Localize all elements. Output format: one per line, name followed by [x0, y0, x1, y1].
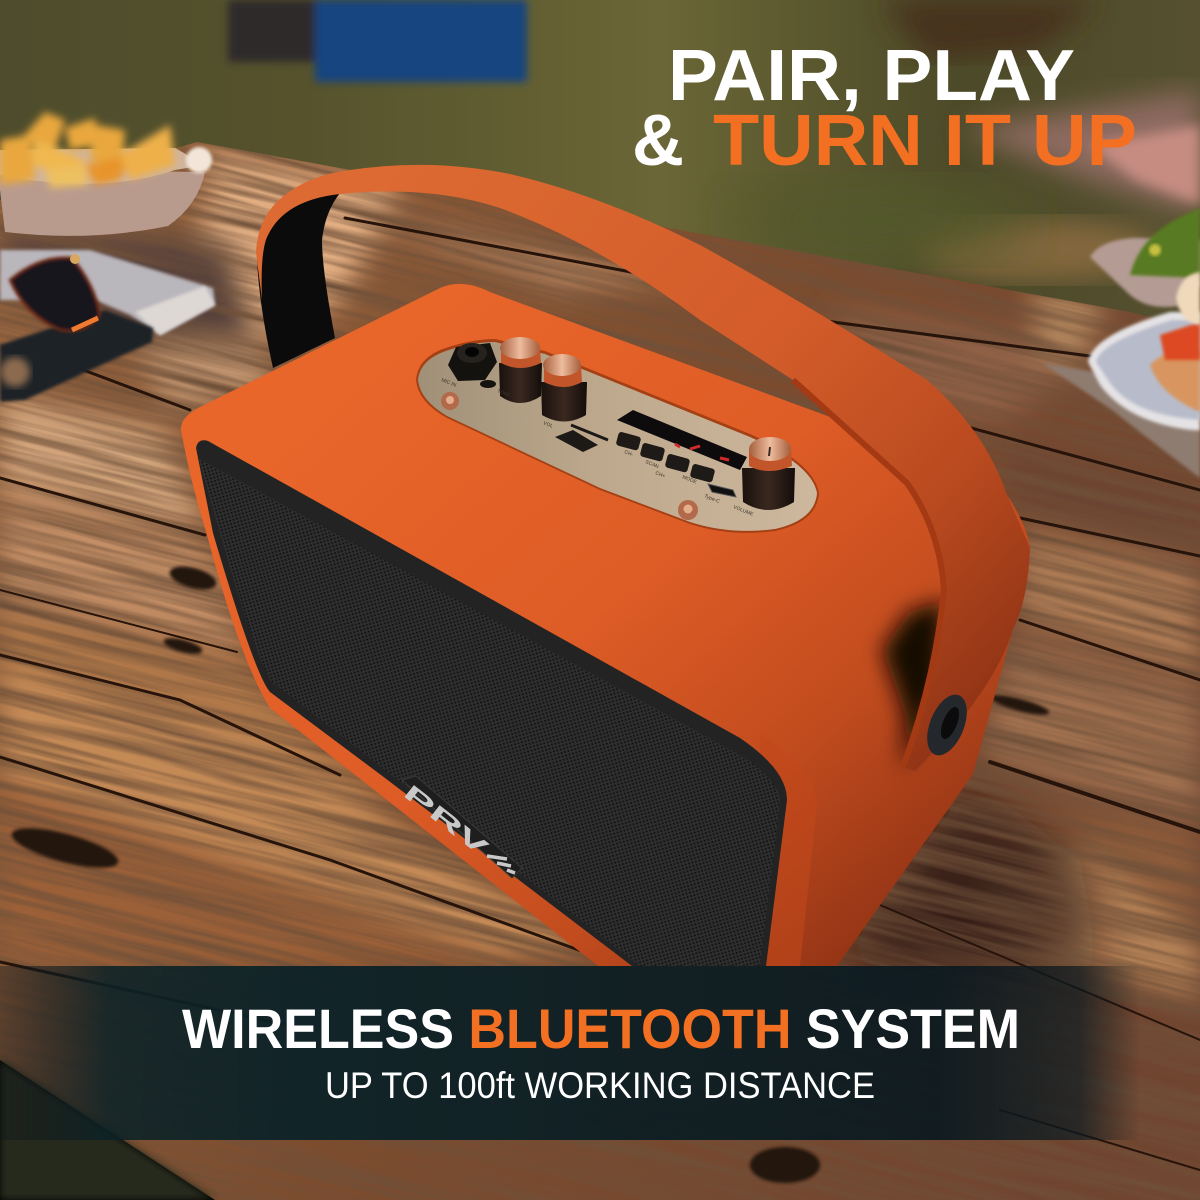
napkin [0, 250, 215, 335]
plate labels [440, 377, 755, 518]
plate labels: VOLUME [732, 504, 755, 518]
speaker [181, 165, 1030, 966]
placemat [1042, 363, 1200, 478]
bowl of fries [0, 112, 212, 236]
banner title: WIRELESS BLUETOOTH SYSTEM [182, 997, 1020, 1060]
ground below table [0, 1060, 215, 1200]
plank seams [0, 218, 1200, 1170]
control plate [416, 337, 819, 533]
speaker grille [196, 440, 787, 966]
plate labels: CH+ [654, 470, 666, 480]
usb-c port [708, 484, 736, 497]
food [1150, 349, 1200, 412]
headline [632, 36, 1137, 181]
plate labels: VOL [542, 420, 554, 430]
knob 2 [541, 354, 587, 422]
plate [1088, 312, 1200, 431]
wood knots [8, 562, 1051, 1183]
back bowl [1090, 238, 1200, 307]
sunglasses, napkin and phone [0, 250, 215, 402]
speaker cast shadow [830, 780, 1100, 966]
plate labels: SCAN [644, 459, 660, 470]
salad [1130, 208, 1200, 278]
plate labels: TONE [496, 388, 512, 399]
handle mount bolt [919, 689, 975, 761]
control buttons [616, 431, 715, 483]
plates of food on the right [1042, 208, 1200, 478]
knob 1 [499, 337, 542, 403]
plate labels: MIC IN [440, 377, 457, 389]
cooler [228, 0, 527, 82]
blanket [960, 90, 1200, 215]
usb and sd slots [555, 425, 608, 452]
headline ampersand: & [632, 101, 684, 181]
grille frame edge [760, 735, 817, 966]
headline line 2: TURN IT UP [713, 101, 1137, 181]
jack input [448, 343, 497, 388]
speaker body [181, 284, 1030, 966]
handle strap [256, 165, 1030, 771]
sunglasses [10, 258, 100, 331]
screw right [678, 500, 698, 520]
plate labels: Type-C [703, 493, 721, 505]
screw left [441, 392, 459, 410]
phone [0, 310, 153, 402]
background: grass and picnic scene [0, 0, 1200, 340]
brand badge: PRV [399, 779, 494, 861]
handle inner lining [257, 193, 340, 368]
banner subtitle: UP TO 100ft WORKING DISTANCE [325, 1065, 875, 1106]
plate labels: CH- [623, 449, 634, 458]
display [617, 410, 747, 470]
strap inner lip [793, 380, 944, 767]
sunlight patches [0, 150, 1200, 1000]
brand badge [399, 776, 522, 878]
bottom banner [0, 966, 1200, 1140]
headline line 1: PAIR, PLAY [668, 36, 1075, 116]
strap shadow on body [882, 600, 945, 770]
plate labels: MODE [681, 474, 698, 486]
volume knob [742, 437, 795, 510]
